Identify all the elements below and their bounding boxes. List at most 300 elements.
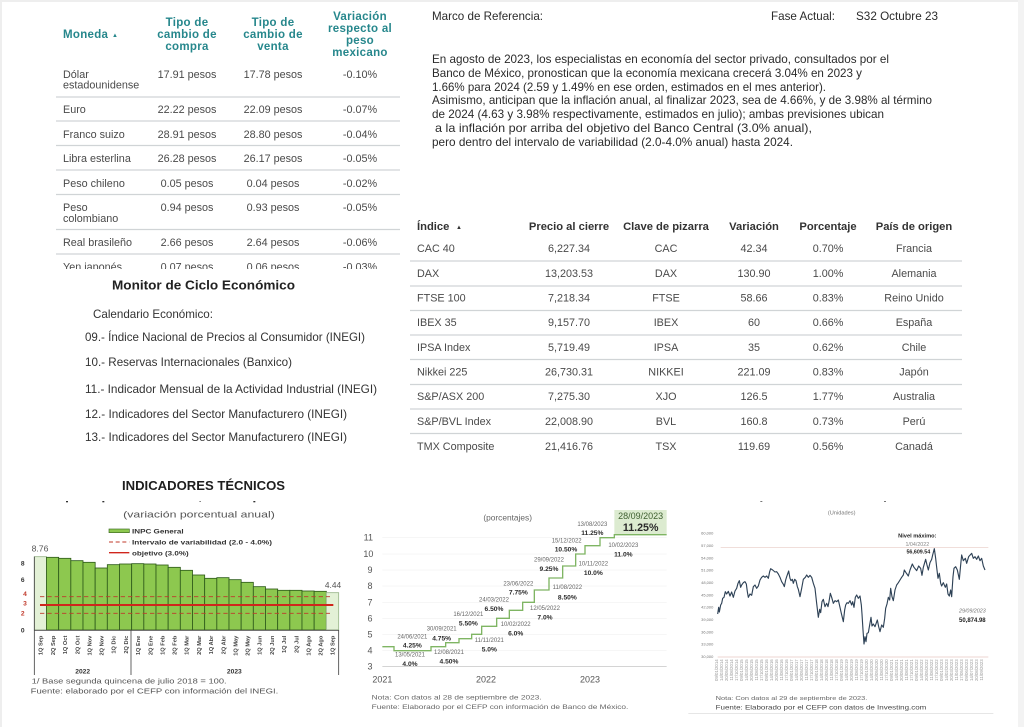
currency table rows: 26.17 pesos: [244, 153, 303, 165]
chart: stock market index line: 09/01/2020: [864, 659, 869, 681]
calendar list: 10.- Reservas Internacionales (Banxico): [85, 355, 292, 369]
indices table rows: NIKKEI: [648, 366, 684, 378]
indices table rows: 1.00%: [813, 268, 844, 280]
currency table rows: 2.66 pesos: [161, 237, 214, 249]
chart: stock market index line: 09/01/2019: [839, 659, 844, 681]
calendar list: [85, 329, 377, 444]
chart: stock market index line: (Unidades): [828, 511, 856, 517]
currency table rows: Dólar: [63, 69, 89, 81]
chart: annual inflation bars: 1/ Base segunda quincena de julio 2018 = 100.: [32, 677, 227, 686]
chart: stock market index line: 09/01/2018: [814, 659, 819, 681]
indices table rows: IBEX: [654, 317, 678, 329]
calendar list: 11.- Indicador Mensual de la Actividad Industrial (INEGI): [85, 382, 377, 396]
currency table rows: 17.91 pesos: [158, 69, 217, 81]
chart: interest rate step line: 11.25%: [623, 522, 659, 534]
chart: stock market index line: 60,000: [701, 531, 714, 536]
indices table rows: CAC 40: [417, 243, 455, 255]
chart: stock market index line: Nota: Con datos al 29 de septiembre de 2023.: [716, 696, 868, 702]
chart: stock market index line: 09/01/2014: [714, 659, 719, 681]
chart: stock market index line: 20/08/2023: [974, 659, 979, 681]
chart: stock market index line: Fuente: Elaborado por el CEFP con datos de Investing.com: [716, 704, 927, 711]
panel: economic calendar: [85, 278, 377, 444]
chart: stock market index line: 36,000: [701, 629, 714, 634]
chart: interest rate step line: 4.25%: [403, 643, 422, 650]
currency table rows: -0.10%: [343, 69, 377, 81]
indices table rows: IPSA: [654, 342, 679, 354]
currency table rows: -0.05%: [343, 153, 377, 165]
chart: interest rate step line: 10.50%: [555, 547, 577, 554]
chart: interest rate step line: 7: [367, 597, 372, 607]
indices table rows: 5,719.49: [548, 342, 590, 354]
currency table header: Variación: [333, 11, 387, 23]
chart: annual inflation bars: 1Q Jul: [282, 635, 288, 653]
chart: annual inflation bars: 2Q Ago: [319, 635, 325, 656]
chart: annual inflation bars: 2Q Jun: [270, 635, 276, 655]
indices table rows: Alemania: [891, 268, 937, 280]
indices table rows: S&P/BVL Index: [417, 416, 492, 428]
currency table header: respecto al: [328, 23, 392, 35]
indices table rows: TSX: [656, 441, 676, 453]
phase value: S32 Octubre 23: [856, 9, 938, 23]
chart: annual inflation bars: 3: [23, 601, 27, 608]
chart: interest rate step line: 30/09/2021: [427, 627, 457, 633]
currency table header: [63, 11, 392, 59]
chart: annual inflation bars: 2Q Jul: [294, 635, 300, 653]
currency table rows: colombiano: [63, 213, 118, 225]
chart: annual inflation bars: 2Q Feb: [173, 635, 179, 655]
chart: stock market index line: 50,874.98: [959, 618, 986, 624]
indices table header: Variación: [729, 221, 779, 233]
indices table rows: 0.70%: [813, 243, 844, 255]
indices table rows: Chile: [902, 342, 926, 354]
indices table rows: [410, 243, 962, 453]
indices table rows: 7,218.34: [548, 292, 590, 304]
chart: stock market index line: 39,000: [701, 617, 714, 622]
chart: stock market index line: 14/07/2023: [969, 659, 974, 681]
indices table rows: 21,416.76: [545, 441, 593, 453]
chart: stock market index line: 11/08/2015: [754, 659, 759, 681]
chart: annual inflation bars: 1Q Nov: [87, 635, 93, 655]
chart: stock market index line: 14/03/2017: [794, 659, 799, 681]
indices table rows: 9,157.70: [548, 317, 590, 329]
chart: interest rate step line: 7.75%: [509, 590, 528, 597]
chart: stock market index line: 14/03/2014: [719, 659, 724, 681]
chart: interest rate step line: 6: [367, 613, 372, 623]
currency table rows: 0.05 pesos: [161, 178, 214, 190]
indices table rows: 119.69: [738, 441, 770, 453]
indices table rows: Francia: [896, 243, 932, 255]
chart: stock market index line: 56,609.54: [906, 549, 930, 555]
chart: stock market index line: 09/01/2022: [914, 659, 919, 681]
indices table rows: 22,008.90: [545, 416, 593, 428]
indices table rows: FTSE 100: [417, 292, 466, 304]
chart: stock market index line: 45,000: [701, 592, 714, 597]
chart: interest rate step line: 5: [367, 629, 372, 639]
chart: stock market index line: 29/09/2023: [958, 608, 986, 614]
indices table rows: 1.77%: [813, 391, 844, 403]
calendar subheading: Calendario Económico:: [93, 307, 213, 321]
chart: stock market index line: 11/08/2014: [729, 659, 734, 681]
indices table rows: BVL: [656, 416, 676, 428]
chart: stock market index line: 33,000: [701, 642, 714, 647]
chart: stock market index line: [688, 501, 993, 713]
chart: stock market index line: 09/01/2017: [789, 659, 794, 681]
reference paragraph: [432, 52, 932, 149]
indices table rows: IPSA Index: [417, 342, 471, 354]
chart: annual inflation bars: 1Q Mar: [185, 635, 191, 655]
chart: annual inflation bars: Intervalo de variabilidad (2.0 - 4.0%): [132, 540, 272, 547]
chart: annual inflation bars: [21, 501, 341, 695]
chart: interest rate step line: 23/06/2022: [503, 581, 534, 587]
currency table rows: Peso: [63, 202, 88, 214]
indices table rows: S&P/ASX 200: [417, 391, 484, 403]
indices table rows: 42.34: [740, 243, 768, 255]
calendar heading: Monitor de Ciclo Económico: [112, 278, 295, 292]
chart: stock market index line: 17/05/2023: [959, 659, 964, 681]
indices table rows: Perú: [903, 416, 925, 428]
chart: stock market index line: 17/10/2014: [734, 659, 739, 681]
chart: stock market index line: 54,000: [701, 555, 714, 560]
currency table rows: -0.06%: [343, 237, 377, 249]
reference paragraph: a la inflación por arriba del objetivo del Banco Central (3.0% anual),: [435, 121, 812, 135]
indices table rows: 0.83%: [813, 292, 844, 304]
chart: interest rate step line: 11.25%: [581, 530, 604, 537]
chart: stock market index line: 09/01/2015: [739, 659, 744, 681]
currency table rows: -0.02%: [343, 178, 377, 190]
indices table header: País de origen: [876, 221, 952, 233]
currency table rows: 22.22 pesos: [158, 104, 217, 116]
indices table rows: Nikkei 225: [417, 366, 467, 378]
currency table rows: Peso chileno: [63, 178, 125, 190]
chart: stock market index line: 20/05/2018: [824, 659, 829, 681]
chart: annual inflation bars: 2Q Sep: [51, 635, 57, 655]
indices table rows: DAX: [417, 268, 439, 280]
indices table rows: XJO: [656, 391, 676, 403]
currency table rows: -0.03%: [343, 262, 377, 274]
indices table rows: Australia: [893, 391, 935, 403]
currency table rows: estadounidense: [63, 80, 139, 92]
reference paragraph: pero dentro del intervalo de variabilidad (2.0-4.0% anual) hasta 2024.: [432, 135, 793, 149]
indices table rows: 35: [748, 342, 760, 354]
chart: interest rate step line: 24/06/2021: [397, 634, 428, 640]
currency table rows: 0.04 pesos: [247, 178, 300, 190]
reference paragraph: En agosto de 2023, los especialistas en economía del sector privado, consultados por el: [432, 52, 889, 66]
currency table header: Tipo de: [166, 17, 208, 29]
chart: interest rate step line: Fuente: Elaborado por el CEFP con información de Banco de México.: [372, 704, 629, 711]
chart: stock market index line: 17/10/2020: [884, 659, 889, 681]
chart: interest rate step line: 10: [363, 549, 373, 559]
chart: annual inflation bars: 2023: [227, 669, 242, 676]
indices table rows: Japón: [899, 366, 929, 378]
chart: interest rate step line: [363, 510, 667, 711]
chart: interest rate step line: 4: [367, 646, 372, 656]
indices table rows: 7,275.30: [548, 391, 590, 403]
chart: interest rate step line: 12/08/2021: [434, 650, 465, 656]
chart: interest rate step line: 4.75%: [432, 636, 451, 643]
chart: stock market index line: 11/08/2016: [779, 659, 784, 681]
chart: stock market index line: 09/01/2021: [889, 659, 894, 681]
indices table rows: TMX Composite: [417, 441, 494, 453]
currency table header: compra: [165, 41, 209, 53]
chart: stock market index line: 11/04/2023: [954, 659, 959, 681]
chart: stock market index line: 14/03/2016: [769, 659, 774, 681]
chart: interest rate step line: 3: [367, 662, 372, 672]
indices table rows: 6,227.34: [548, 243, 590, 255]
chart: stock market index line: 11/08/2022: [929, 659, 934, 681]
chart: stock market index line: 09/06/2023: [964, 659, 969, 681]
chart: stock market index line: 20/05/2022: [924, 659, 929, 681]
indices table rows: 0.83%: [813, 366, 844, 378]
panel: currency exchange table: [56, 11, 400, 274]
chart: interest rate step line: 5.0%: [482, 646, 497, 653]
currency table rows: [56, 69, 400, 274]
indices table rows: 60: [748, 317, 760, 329]
chart: annual inflation bars: 1Q Jun: [258, 635, 264, 655]
currency table rows: 26.28 pesos: [158, 153, 217, 165]
chart: stock market index line: 30,000: [701, 654, 714, 659]
phase label: Fase Actual:: [771, 9, 835, 23]
chart: stock market index line: 17/10/2016: [784, 659, 789, 681]
currency table rows: Franco suizo: [63, 129, 125, 141]
chart: interest rate step line: 10.0%: [584, 570, 603, 577]
chart: annual inflation bars: (variación porcentual anual): [123, 509, 275, 519]
currency table rows: 28.80 pesos: [244, 129, 303, 141]
indices table rows: 0.73%: [813, 416, 844, 428]
currency table rows: 0.94 pesos: [161, 202, 214, 214]
currency table rows: Real brasileño: [63, 237, 132, 249]
chart: stock market index line: 17/10/2017: [809, 659, 814, 681]
chart: interest rate step line: 10/02/2022: [501, 622, 531, 628]
currency table rows: 0.93 pesos: [247, 202, 300, 214]
calendar list: 13.- Indicadores del Sector Manufacturero (INEGI): [85, 430, 347, 444]
chart: interest rate step line: 13/05/2021: [395, 653, 426, 659]
reference heading: Marco de Referencia:: [432, 9, 543, 23]
currency table header: Tipo de: [252, 17, 294, 29]
chart: stock market index line: 20/05/2020: [874, 659, 879, 681]
chart: stock market index line: 11/08/2020: [879, 659, 884, 681]
chart: interest rate step line: 11/11/2021: [475, 638, 505, 644]
currency table rows: 17.78 pesos: [244, 69, 303, 81]
chart: stock market index line: 20/05/2017: [799, 659, 804, 681]
chart: stock market index line: 14/03/2019: [844, 659, 849, 681]
indices table header: ▲: [456, 225, 462, 231]
chart: interest rate step line: 16/12/2021: [453, 612, 484, 618]
chart: interest rate step line: (porcentajes): [483, 513, 532, 523]
indices table rows: FTSE: [652, 292, 680, 304]
chart: stock market index line: 11/08/2017: [804, 659, 809, 681]
indices table rows: España: [896, 317, 932, 329]
indices table header: Índice: [417, 220, 449, 233]
chart: stock market index line: 17/10/2021: [909, 659, 914, 681]
chart: interest rate step line: 29/09/2022: [534, 558, 565, 564]
panel: stock indices table: [410, 220, 962, 453]
chart: interest rate step line: 13/08/2023: [577, 522, 608, 528]
chart: interest rate step line: 10/02/2023: [608, 543, 639, 549]
chart: annual inflation bars: 1Q Feb: [160, 635, 166, 655]
chart: stock market index line: 09/01/2023: [939, 659, 944, 681]
chart: annual inflation bars: 6: [21, 577, 25, 584]
chart: annual inflation bars: INPC General: [132, 528, 184, 535]
indices table rows: 0.66%: [813, 317, 844, 329]
chart: stock market index line: 11/09/2023: [979, 659, 984, 681]
calendar list: 09.- Índice Nacional de Precios al Consumidor (INEGI): [85, 329, 365, 344]
chart: stock market index line: 20/03/2023: [949, 659, 954, 681]
chart: interest rate step line: 6.0%: [508, 631, 523, 638]
chart: interest rate step line: 9: [367, 565, 372, 575]
chart: interest rate step line: 8.50%: [558, 595, 577, 602]
chart: interest rate step line: 4.50%: [440, 659, 459, 666]
chart: interest rate step line: 8: [367, 581, 372, 591]
indices table header: Porcentaje: [799, 221, 857, 233]
chart: interest rate step line: 7.0%: [537, 614, 553, 621]
currency table rows: Euro: [63, 104, 86, 116]
chart: stock market index line: 11/08/2018: [829, 659, 834, 681]
chart: stock market index line: 17/10/2018: [834, 659, 839, 681]
indices table header: Precio al cierre: [529, 221, 609, 233]
chart: stock market index line: 14/03/2020: [869, 659, 874, 681]
chart: stock market index line: 14/03/2018: [819, 659, 824, 681]
chart: annual inflation bars: 8.76: [32, 543, 49, 553]
currency table header: peso: [346, 35, 374, 47]
chart: interest rate step line: 4.0%: [402, 661, 418, 668]
currency table rows: -0.04%: [343, 129, 377, 141]
chart: interest rate step line: 2022: [476, 674, 496, 684]
chart: annual inflation bars: 1Q Ago: [306, 635, 312, 656]
currency table header: mexicano: [332, 47, 388, 59]
heading: technical indicators: INDICADORES TÉCNICOS: [122, 478, 285, 493]
indices table rows: 160.8: [740, 416, 768, 428]
chart: annual inflation bars: 2Q Oct: [75, 636, 81, 654]
currency table rows: -0.05%: [343, 202, 377, 214]
reference paragraph: de 2024 (4.63 y 3.98% respectivamente, estimados en julio); ambas previsiones ubican: [432, 107, 884, 121]
currency table rows: 28.91 pesos: [158, 129, 217, 141]
indices table rows: 130.90: [737, 268, 771, 280]
chart: annual inflation bars: 1Q Dic: [112, 636, 118, 654]
chart: annual inflation bars: objetivo (3.0%): [132, 551, 189, 558]
chart: interest rate step line: 6.50%: [485, 606, 504, 613]
indices table rows: IBEX 35: [417, 317, 457, 329]
reference paragraph: 1.66% para 2024 (2.59 y 1.49% en ese orden, estimados en el mes anterior).: [432, 80, 826, 94]
chart: annual inflation bars: 2Q May: [246, 635, 252, 656]
chart: interest rate step line: 2021: [372, 674, 392, 684]
chart: annual inflation bars: 8: [21, 560, 25, 567]
chart: stock market index line: 20/05/2021: [899, 659, 904, 681]
chart: interest rate step line: 28/09/2023: [618, 511, 663, 521]
chart: annual inflation bars: 1Q Sep: [331, 635, 337, 655]
chart: stock market index line: 1/04/2022: [905, 542, 929, 548]
chart: annual inflation bars: 2Q Dic: [124, 636, 130, 654]
indices table rows: CAC: [655, 243, 678, 255]
indices table header: [417, 220, 952, 233]
currency table rows: 22.09 pesos: [244, 104, 303, 116]
indices table rows: 58.66: [740, 292, 768, 304]
indices table rows: 13,203.53: [545, 268, 593, 280]
chart: annual inflation bars: 1Q Abr: [209, 635, 215, 654]
chart: stock market index line: 17/10/2022: [934, 659, 939, 681]
chart: annual inflation bars: 4.44: [325, 580, 341, 590]
currency table header: venta: [257, 41, 289, 53]
currency table rows: 2.64 pesos: [247, 237, 300, 249]
indices table rows: 126.5: [740, 391, 768, 403]
chart: interest rate step line: 24/03/2022: [479, 598, 510, 604]
chart: stock market index line: 14/03/2022: [919, 659, 924, 681]
currency table header: Moneda: [63, 29, 109, 41]
reference paragraph: Banco de México, pronostican que la economía mexicana crecerá 3.04% en 2023 y: [432, 66, 862, 80]
indices table rows: DAX: [655, 268, 677, 280]
chart: annual inflation bars: 2022: [75, 669, 90, 676]
chart: annual inflation bars: 2: [21, 610, 25, 617]
chart: stock market index line: 20/05/2019: [849, 659, 854, 681]
indices table rows: 26,730.31: [545, 366, 593, 378]
currency table rows: Yen japonés: [63, 262, 123, 274]
chart: interest rate step line: 11/08/2022: [553, 585, 583, 591]
chart: interest rate step line: 12/05/2022: [530, 606, 561, 612]
chart: annual inflation bars: 1Q Ene: [136, 636, 142, 655]
chart: stock market index line: 57,000: [701, 543, 714, 548]
chart: annual inflation bars: Fuente: elaborado por el CEFP con información del INEGI.: [31, 686, 278, 695]
currency table rows: 0.07 pesos: [161, 262, 214, 274]
chart: stock market index line: 14/03/2015: [744, 659, 749, 681]
chart: annual inflation bars: 1Q Sep: [39, 635, 45, 655]
chart: interest rate step line: 11.0%: [614, 552, 633, 559]
chart: annual inflation bars: 2Q Abr: [221, 635, 227, 654]
indices table header: Clave de pizarra: [623, 221, 710, 233]
chart: stock market index line: 17/10/2015: [759, 659, 764, 681]
chart: stock market index line: Nivel máximo:: [898, 534, 937, 540]
chart: interest rate step line: 5.50%: [459, 621, 478, 628]
chart: annual inflation bars: 4: [23, 591, 27, 598]
chart: annual inflation bars: 0: [21, 628, 25, 635]
chart: stock market index line: 09/01/2016: [764, 659, 769, 681]
chart: interest rate step line: Nota: Con datos al 28 de septiembre de 2023.: [372, 694, 542, 701]
chart: interest rate step line: 10/11/2022: [579, 562, 609, 568]
currency table rows: 0.06 pesos: [247, 262, 300, 274]
chart: stock market index line: 17/10/2019: [859, 659, 864, 681]
currency table header: cambio de: [243, 29, 303, 41]
chart: annual inflation bars: 1Q Oct: [63, 636, 69, 654]
chart: stock market index line: 14/03/2021: [894, 659, 899, 681]
chart: interest rate step line: 11: [364, 533, 373, 543]
chart: stock market index line: 20/05/2015: [749, 659, 754, 681]
calendar list: 12.- Indicadores del Sector Manufacturero (INEGI): [85, 407, 347, 421]
indices table rows: 0.56%: [813, 441, 844, 453]
panel: reference framework: [432, 9, 938, 149]
indices table rows: Reino Unido: [884, 292, 944, 304]
chart: stock market index line: 11/08/2021: [904, 659, 909, 681]
chart: annual inflation bars: 1Q May: [233, 635, 239, 656]
chart: stock market index line: 20/05/2016: [774, 659, 779, 681]
indices table rows: Canadá: [895, 441, 933, 453]
chart: annual inflation bars: 2Q Nov: [100, 635, 106, 655]
chart: interest rate step line: 15/12/2022: [552, 539, 582, 545]
chart: interest rate step line: 2023: [580, 674, 600, 684]
chart: annual inflation bars: 2Q Mar: [197, 635, 203, 655]
indices table rows: 0.62%: [813, 342, 844, 354]
reference paragraph: Asimismo, anticipan que la inflación anual, al finalizar 2023, sea de 4.66%, y de 3.98% al término: [432, 93, 932, 107]
indices table rows: 221.09: [737, 366, 771, 378]
currency table header: cambio de: [157, 29, 217, 41]
chart: stock market index line: 11/08/2019: [854, 659, 859, 681]
chart: interest rate step line: 9.25%: [540, 566, 559, 573]
chart: stock market index line: 14/02/2023: [944, 659, 949, 681]
chart: stock market index line: 51,000: [701, 568, 714, 573]
currency table header: ▲: [112, 33, 118, 39]
chart: stock market index line: 42,000: [701, 605, 714, 610]
currency table rows: -0.07%: [343, 104, 377, 116]
chart: stock market index line: 48,000: [701, 580, 714, 585]
chart: annual inflation bars: 2Q Ene: [148, 636, 154, 655]
currency table rows: Libra esterlina: [63, 153, 131, 165]
